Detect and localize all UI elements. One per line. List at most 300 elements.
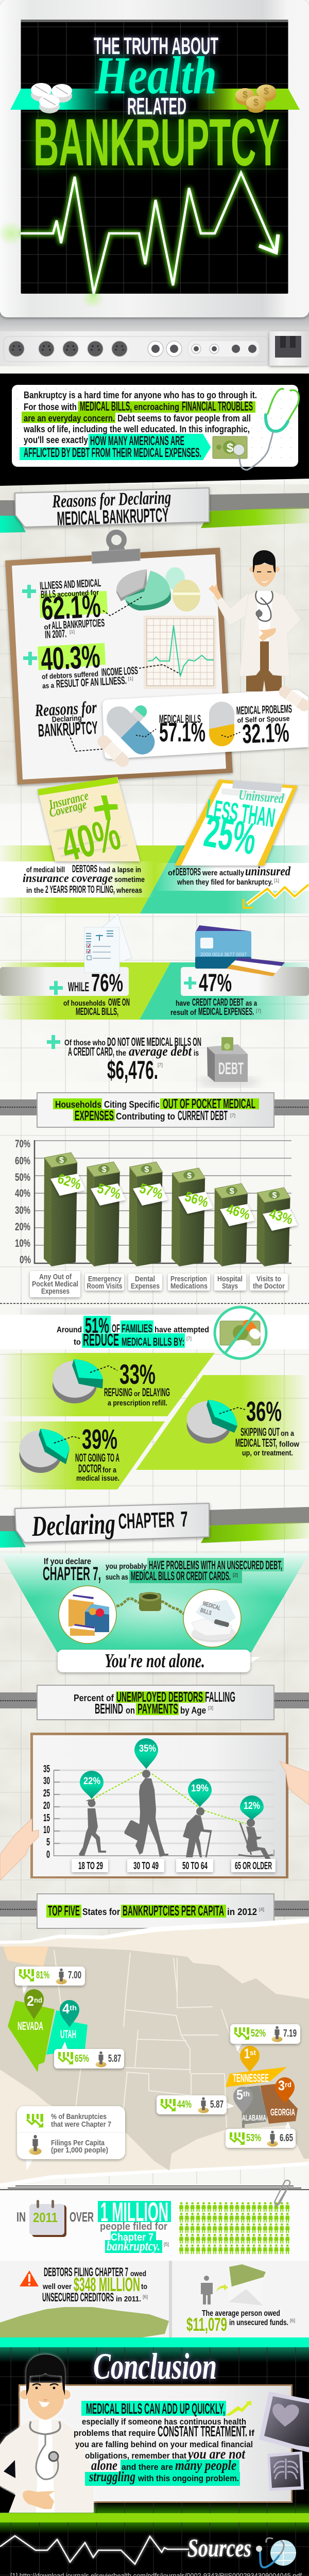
text: uninsured debtors: uninsured: [245, 865, 290, 878]
pin: 22%: 22%: [83, 1776, 100, 1787]
heading: conclusion: Conclusion: [93, 2346, 217, 2387]
bar: dental 57%: [129, 1162, 168, 1266]
stat: average debt: the: [116, 1049, 126, 1058]
panel: 39% not going to doctor: for a: [102, 1466, 117, 1475]
people pictogram: [179, 2202, 290, 2255]
text: insurance lapse: [23, 863, 145, 895]
intro card: [12, 385, 299, 470]
arrow: yellow zigzag: [244, 885, 308, 908]
ribbon green: [201, 1522, 309, 1543]
chart axes and grid: [35, 1140, 291, 1263]
icon: paperclip: [274, 2180, 290, 2208]
conclusion text: obligations, remember that: [85, 2451, 186, 2461]
pin: georgia 3rd: [275, 2077, 295, 2104]
stat: 348 million: to: [141, 2282, 147, 2291]
pin: tennessee 1st: st: [250, 2048, 256, 2057]
icon: right hand: [280, 1761, 309, 1805]
conclusion text: [74, 2401, 254, 2484]
icon: calendar 2011: 2011: [33, 2210, 58, 2225]
intro text: are an everyday concern.: [24, 413, 115, 423]
chart header: top five states: [0, 1894, 309, 1928]
clipboard: INCOME LOSS: [101, 665, 138, 679]
text: families reduce bills: FAMILIES: [122, 1322, 152, 1335]
ECG trace white: [0, 2536, 189, 2564]
x-ray: heart: [259, 2392, 309, 2452]
chart y labels: 30%: [15, 1205, 30, 1216]
chart category labels: Room Visits: [87, 1282, 123, 1291]
conclusion text: with this ongoing problem.: [138, 2473, 239, 2483]
text: insurance lapse: 2 YEARS PRIOR TO FILING,: [45, 884, 115, 895]
stat: medical problems: of Self or Spouse: [237, 714, 290, 724]
ECG trace: [21, 173, 278, 294]
stat: 348 million: [20, 2265, 148, 2304]
icon: coins: $: [264, 86, 269, 96]
text: uninsured debtors: when they filed for bankruptcy.: [177, 878, 273, 887]
icon: warning triangle: [20, 2270, 39, 2286]
heading: sources: Sources: [187, 2533, 251, 2562]
bar: any out of pocket 62%: 62%: [56, 1171, 83, 1193]
intro text: Bankruptcy is a hard time for anyone who has to go through it.: [24, 390, 257, 400]
chart header: out of pocket: [0, 1093, 309, 1127]
age labels: 50 TO 64: [182, 1860, 208, 1872]
stat bubble: alabama: 5.87: [210, 2099, 224, 2110]
intro text: For those with: [24, 402, 77, 412]
age labels: 18 TO 29: [78, 1860, 103, 1872]
pin: alabama 5th: th: [243, 2090, 250, 2098]
stat bubble: tennessee: [230, 2024, 300, 2052]
stat: 348 million: owed: [130, 2269, 146, 2278]
stat: medical bills: [136, 713, 205, 748]
stat: average debt: average debt: [129, 1044, 192, 1059]
chart y labels: [43, 1764, 50, 1860]
panel: 39% not going to doctor: medical issue.: [76, 1474, 119, 1483]
panel: 33% refusing: a prescription refill.: [108, 1399, 167, 1408]
pin: utah 4th: 4: [62, 2001, 70, 2016]
left ribbon: [10, 89, 110, 110]
map panel: [0, 1918, 309, 2187]
chart category labels: the Doctor: [253, 1282, 285, 1291]
icon: stethoscope: [233, 389, 299, 470]
stat: 348 million: $348 MILLION: [74, 2274, 140, 2296]
stat: 11,079: $11,079: [186, 2314, 227, 2335]
funnel text: [43, 1556, 282, 1584]
banner heading: [52, 487, 172, 530]
panel: 33% refusing: [0, 1353, 215, 1416]
text: uninsured debtors: [1]: [274, 878, 279, 883]
sources panel: [0, 2522, 309, 2576]
callout: you're not alone: [58, 1650, 260, 1672]
chart y labels: 40%: [15, 1188, 30, 1199]
icon: no pills and money: [215, 1307, 266, 1359]
funnel text: you probably: [106, 1562, 147, 1571]
conclusion board: [19, 2384, 293, 2503]
chart header: unemployed debtors: Percent of: [74, 1693, 114, 1703]
clipboard: uninsured: 25%: [201, 806, 260, 864]
stat: average debt: [7]: [158, 1062, 163, 1067]
doctor illustration: [209, 550, 301, 691]
chart category labels: Any Out of: [39, 1273, 72, 1281]
stat: 62.1%: ILLNESS AND MEDICAL: [40, 577, 101, 592]
text: families reduce bills: 51%: [85, 1313, 109, 1337]
bar: any out of pocket 62%: $: [59, 1156, 64, 1165]
banner heading: Reasons for Declaring: [52, 487, 171, 512]
stat: 1 million: 1 MILLION: [100, 2197, 168, 2227]
stat bubble: alabama: [157, 2095, 234, 2114]
panel: chapter 7 funnel: [0, 1553, 309, 1672]
icon: pile of money: [0, 2307, 169, 2342]
stat: 76%: WHILE: [68, 980, 89, 994]
icon: credit card circle: [59, 1586, 116, 1643]
notepad: insurance coverage: 40%: [56, 808, 125, 871]
chart header: top five states: [4]: [259, 1907, 264, 1912]
stat bubble: utah: [54, 2042, 124, 2069]
stat bubble: tennessee: 7.19: [283, 2028, 297, 2039]
pin: 19%: [188, 1778, 212, 1807]
chart y labels: 25: [43, 1788, 50, 1799]
text: uninsured debtors: [168, 865, 290, 887]
conclusion text: you are not: [186, 2446, 246, 2462]
state lines: [54, 1950, 242, 2128]
stat: 47%: [170, 970, 261, 1018]
bar: prescription 56%: $: [187, 1172, 192, 1180]
clipboard: uninsured: [175, 779, 298, 866]
icon: bandage top: [277, 684, 309, 714]
chart y labels: 20%: [15, 1221, 30, 1233]
icon: plus: [22, 585, 36, 598]
trend line: [93, 1772, 246, 1824]
conclusion text: you are falling behind on your medical financial: [75, 2439, 253, 2449]
state: utah: [46, 2010, 88, 2055]
intro text: HOW MANY AMERICANS ARE: [90, 434, 184, 448]
text: families reduce bills: REDUCE: [83, 1330, 119, 1349]
title: [33, 32, 280, 180]
chart header: out of pocket: Households: [55, 1099, 101, 1110]
chart header: top five states: TOP FIVE: [48, 1903, 80, 1919]
text: families reduce bills: to: [74, 1338, 81, 1347]
black intro band: [0, 374, 309, 486]
state: alabama: [242, 2086, 267, 2128]
panel: green and teal band 2: [0, 962, 309, 1020]
land mass: [0, 1946, 309, 2171]
state: nevada: NEVADA: [18, 2020, 43, 2032]
stat: 348 million: in 2011.: [116, 2295, 141, 2303]
panel: 36% skipping: on a: [281, 1429, 295, 1438]
stat: 47%: CREDIT CARD DEBT: [192, 997, 244, 1008]
title line: health: Health: [94, 46, 217, 105]
text: families reduce bills: OF: [112, 1322, 120, 1335]
callout: you're not alone: You're not alone.: [105, 1650, 205, 1672]
chart header: unemployed debtors: on: [126, 1705, 135, 1716]
monitor bezel: [0, 0, 309, 317]
chart header: top five states: States for: [82, 1907, 120, 1917]
bar: dental 57%: $: [144, 1165, 149, 1174]
stat: 40.3%: as a: [42, 681, 55, 690]
icon: medical bills circle: BILLS: [199, 1606, 213, 1617]
conclusion text: If: [249, 2428, 254, 2438]
notebook top lines: [0, 2186, 309, 2190]
state: tennessee: [226, 2067, 287, 2087]
pin: 12%: 12%: [244, 1801, 260, 1811]
stat: 1 million: Chapter 7: [111, 2232, 153, 2243]
stat: 62.1%: of: [44, 622, 51, 631]
pie with pills illustration: [103, 567, 200, 616]
monitor connector panel: [0, 331, 309, 366]
stat bubble: utah: 65%: [75, 2053, 89, 2064]
chart header: out of pocket: EXPENSES: [75, 1108, 114, 1123]
notepad: insurance coverage: Coverage: [48, 798, 88, 820]
icon: person to envelope: [201, 2264, 266, 2306]
chart header: unemployed debtors: BEHIND: [95, 1701, 123, 1717]
clipboard: [5, 532, 233, 785]
funnel text: [2]: [233, 1572, 238, 1578]
text: in: IN: [16, 2209, 26, 2225]
stat: 40.3%: [1]: [128, 676, 133, 681]
bezel glow from trace: [0, 221, 104, 308]
intro text: you'll see exactly: [24, 435, 88, 445]
pin: utah 4th: th: [70, 2004, 77, 2012]
ribbon teal: [0, 1531, 26, 1548]
stat: medical problems: [236, 702, 293, 750]
intro text: [23, 390, 257, 460]
notepad: insurance coverage: Insurance: [47, 789, 90, 812]
icon: left hand: [0, 1819, 39, 1880]
bar: any out of pocket 62%: [44, 1153, 85, 1266]
stat: average debt: $6,476.: [107, 1056, 158, 1084]
pin: georgia 3rd: 3: [278, 2078, 285, 2093]
section banner: reasons for declaring: MEDICAL BANKRUPTCY: [57, 504, 169, 530]
stat bubble: nevada: 81%: [36, 1970, 49, 1981]
x-ray: ribs: [267, 2451, 304, 2491]
icon: medical forms: [84, 914, 132, 973]
stat: 62.1%: ALL BANKRUPTCIES: [52, 617, 105, 632]
state: alabama: ALABAMA: [242, 2114, 266, 2123]
stat: 47%: [7]: [256, 1008, 261, 1013]
text: uninsured debtors: of: [168, 869, 176, 877]
right ribbon: [197, 89, 300, 110]
age labels: 30 TO 49: [133, 1860, 159, 1872]
bar chart: [15, 1138, 298, 1297]
funnel text: such as: [106, 1573, 128, 1582]
panel: green and teal band 1: [0, 845, 309, 913]
text: families reduce bills: [57, 1313, 209, 1349]
stat: 1 million: bankruptcy.: [107, 2239, 160, 2253]
text: families reduce bills: have attempted: [154, 1326, 209, 1334]
stat: average debt: is: [194, 1049, 199, 1058]
banner panel: [15, 1503, 209, 1543]
chart category labels: Dental: [135, 1275, 155, 1283]
intro text: MEDICAL BILLS,: [80, 399, 132, 414]
stat: 47%: 47%: [199, 970, 232, 997]
stat: 348 million: well over: [42, 2282, 72, 2291]
text: DO NOT OWE MEDICAL BILLS ON: [107, 1035, 201, 1048]
pie: [53, 1359, 103, 1403]
icon: credit cards: [195, 925, 285, 976]
bar: emergency room 57%: [87, 1162, 126, 1266]
stat: 348 million: UNSECURED CREDITORS: [42, 2291, 114, 2304]
text: insurance lapse: whereas: [116, 886, 142, 895]
stat: 62.1%: IN 2007.: [45, 628, 67, 641]
ribbon teal: [0, 516, 26, 533]
chart header: unemployed debtors: by Age: [180, 1705, 206, 1716]
text: uninsured debtors: were actually: [202, 869, 245, 877]
chart category labels: Expenses: [41, 1287, 70, 1296]
stat bubble: tennessee: 52%: [251, 2028, 266, 2039]
bar: hospital 46%: $: [230, 1187, 234, 1196]
bar: visits 43%: [256, 1188, 298, 1266]
map legend: [17, 2106, 125, 2171]
bar: emergency room 57%: $: [102, 1165, 107, 1174]
icon: bandage bottom: [95, 733, 131, 769]
text: insurance lapse: in the: [26, 886, 44, 895]
chart header: unemployed debtors: [0, 1685, 309, 1720]
stat bubble: georgia: 6.65: [280, 2132, 293, 2144]
panel: 36% skipping: 36%: [246, 1396, 282, 1427]
icon: rising arrow: [226, 2401, 251, 2416]
notepad: insurance coverage: [38, 777, 140, 871]
icon: chain and cuff: [116, 1592, 183, 1614]
conclusion panel: [0, 2346, 309, 2513]
bar: visits 43%: 43%: [267, 1206, 295, 1227]
intro highlights: [20, 401, 255, 460]
stat: 76%: of households: [63, 999, 106, 1008]
banner heading: CHAPTER: [118, 1507, 175, 1533]
pin: 35%: [134, 1738, 158, 1769]
stat: 76%: [49, 970, 130, 1018]
stat bubble: utah: 5.87: [108, 2053, 121, 2064]
banner panel: [15, 488, 209, 527]
ribbon gray: [0, 1516, 21, 1531]
pin: alabama 5th: [233, 2087, 253, 2114]
stat: 62.1%: 62.1%: [41, 588, 101, 627]
pin: nevada 2nd: [24, 1989, 44, 2020]
stat: 47%: have: [176, 999, 190, 1008]
text: insurance lapse: of medical bill: [26, 866, 65, 874]
title line: related: RELATED: [127, 93, 186, 120]
icon: plus: [94, 795, 118, 820]
banner heading: 7: [180, 1507, 188, 1531]
panel: 36% skipping: up, or treatment.: [242, 1449, 293, 1458]
state: tennessee: TENNESSEE: [233, 2072, 269, 2084]
chart y labels: [15, 1138, 31, 1266]
silhouette: person in rocking chair: [238, 1819, 273, 1859]
section banner: reasons for declaring: [0, 487, 309, 533]
pie: [187, 1400, 237, 1444]
pin: utah 4th: [60, 2000, 79, 2027]
text: insurance lapse: had a lapse in: [99, 866, 141, 874]
ribbon green: [201, 507, 309, 528]
stat: 348 million: [6]: [143, 2294, 148, 2299]
region: washington: [3, 1946, 48, 1967]
chart y labels: 10%: [15, 1238, 30, 1249]
clipboard clip: [92, 532, 140, 564]
bar: emergency room 57%: 57%: [95, 1180, 123, 1202]
icon: coins: $: [253, 97, 259, 108]
teal bar: [0, 2337, 309, 2347]
chart y labels: 20: [43, 1800, 50, 1811]
map paper: [0, 1923, 309, 2183]
chart header: out of pocket: [7]: [230, 1113, 235, 1118]
bar: visits 43%: $: [272, 1191, 277, 1200]
icon: globe and stethoscope: [256, 2538, 296, 2567]
icon: debt box: DEBT: [218, 1059, 244, 1078]
chart y labels: 70%: [15, 1138, 30, 1150]
card heading: Declaring: [52, 714, 82, 724]
age chart board: [0, 1733, 309, 1880]
stat: 62.1%: [22, 577, 108, 641]
icon: calendar 2011: [29, 2200, 66, 2237]
chart header: out of pocket: Citing Specific: [104, 1099, 160, 1110]
white strip behind families text: [0, 1309, 309, 1349]
icon: blue capsule: [101, 701, 160, 759]
conclusion highlights: [81, 2401, 240, 2486]
stat: 40.3%: [23, 637, 139, 691]
chart category labels: Medications: [170, 1282, 208, 1291]
conclusion text: especially if someone has continuous health: [82, 2417, 246, 2427]
stat: 76%: OWE ON: [108, 997, 130, 1008]
stat bubble: nevada: 7.00: [68, 1970, 81, 1981]
chart header: top five states: in 2012: [227, 1907, 257, 1917]
stat: average debt: A CREDIT CARD,: [68, 1045, 114, 1058]
icon: coins: $: [243, 90, 248, 100]
bar: hospital 46%: [214, 1183, 255, 1266]
chart category labels: Pocket Medical: [32, 1280, 78, 1289]
pin: tennessee 1st: 1: [244, 2046, 250, 2061]
panel: 39% not going to doctor: [0, 1421, 165, 1489]
icon: small teal capsule: [126, 703, 149, 727]
chart y labels: 5: [46, 1837, 50, 1848]
text: insurance lapse: DEBTORS: [72, 863, 97, 875]
panel: 36% skipping: follow: [279, 1440, 299, 1449]
stat: 47%: result of: [170, 1008, 197, 1017]
chart y labels: 60%: [15, 1155, 30, 1167]
chart header: out of pocket: CURRENT DEBT: [178, 1108, 228, 1123]
conclusion text: alone: [91, 2458, 117, 2473]
panel: 33% refusing: DELAYING: [142, 1386, 170, 1399]
panel: 39% not going to doctor: 39%: [82, 1424, 117, 1455]
chart category labels: Stays: [222, 1282, 238, 1291]
monitor screen: [21, 20, 288, 294]
clipboard: uninsured: Uninsured: [238, 787, 285, 806]
pin: 22%: [80, 1771, 104, 1799]
chart y labels: 0%: [20, 1254, 31, 1266]
stat bubble: nevada: [15, 1967, 85, 1994]
text: over: OVER: [70, 2209, 94, 2225]
text: insurance lapse: insurance coverage: [23, 872, 113, 885]
chart category labels: Expenses: [131, 1282, 160, 1291]
chart category labels: Emergency: [88, 1275, 122, 1283]
map legend: Filings Per Capita: [51, 2139, 105, 2147]
bar: prescription 56%: 56%: [183, 1189, 210, 1210]
chart header: out of pocket: Contributing to: [116, 1111, 175, 1122]
state: utah: UTAH: [60, 2028, 76, 2041]
icon: coins: [235, 84, 276, 113]
divider: [169, 2261, 172, 2337]
panel: 33% refusing: or: [134, 1389, 140, 1398]
banner heading: Declaring: [31, 1508, 116, 1543]
icon: pills: [31, 83, 72, 113]
text: uninsured debtors: DEBTORS: [176, 867, 201, 878]
chart header: unemployed debtors: [3]: [208, 1705, 213, 1710]
stat: 62.1%: BILLS: [41, 588, 56, 601]
stat: medical bills: MEDICAL BILLS: [159, 713, 201, 725]
intro text: walks of life, including the well educated. In this infographic,: [23, 424, 250, 434]
panel: 39% not going to doctor: DOCTOR: [78, 1462, 101, 1475]
under-monitor shadow band: [0, 312, 309, 333]
green bar: [0, 2513, 309, 2522]
intro text: encroaching: [134, 402, 179, 412]
state: nevada: [8, 2001, 55, 2072]
text: families reduce bills: [7]: [186, 1336, 192, 1341]
